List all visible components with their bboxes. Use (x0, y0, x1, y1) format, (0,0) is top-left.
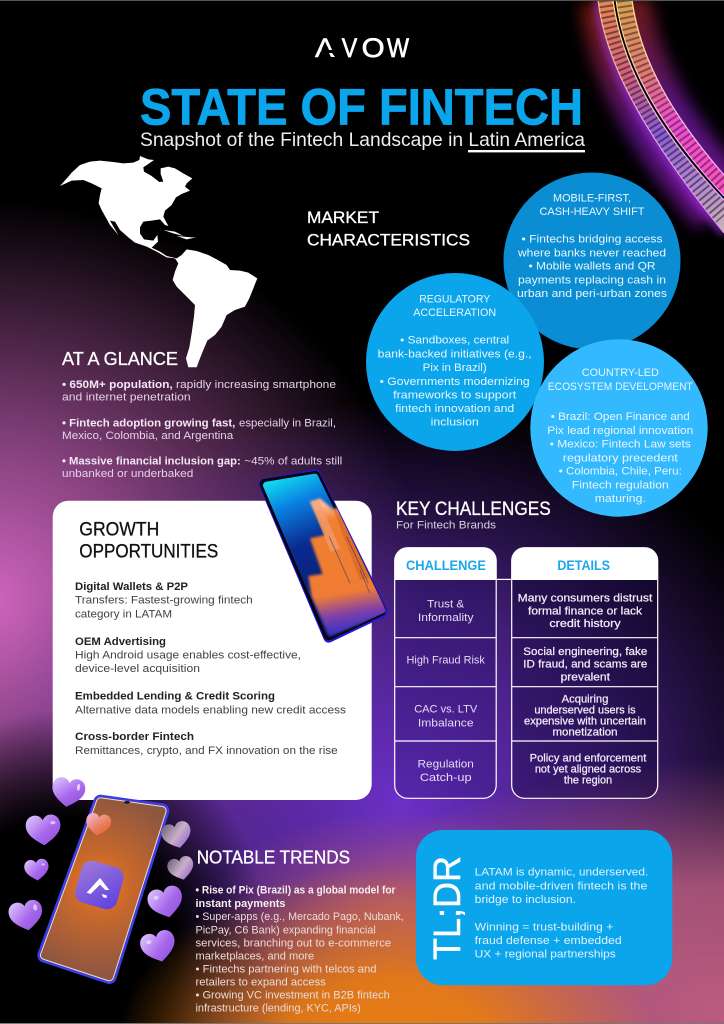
item: OEM advertising (75, 636, 301, 675)
column: details: Social engineering, fake (523, 646, 647, 658)
item: cross-border fintech (75, 731, 338, 757)
text block: notable trends bullets: retailers to expand access (196, 976, 326, 988)
text block: notable trends bullets: PicPay, C6 Bank) expanding financial (196, 924, 376, 936)
heading: key challenges (396, 499, 551, 532)
column: details: expensive with uncertain (524, 715, 646, 727)
panel: mobile-first circle: where banks never reached (517, 247, 666, 259)
column: details: DETAILS (557, 558, 610, 573)
item: OEM advertising: High Android usage enables cost-effective, (75, 649, 301, 661)
text block: summary: Winning = trust-building + (475, 921, 614, 933)
icon: hearts (7, 776, 196, 966)
icon: app logo (73, 858, 126, 912)
title: STATE OF FINTECH (140, 78, 583, 136)
item: cross-border fintech: Remittances, crypto, and FX innovation on the rise (75, 745, 338, 757)
panel: regulatory acceleration circle: • Sandboxes, central (400, 335, 509, 347)
text block: notable trends bullets: • Fintechs partnering with telcos and (196, 963, 376, 975)
column: details: monetization (552, 726, 618, 738)
column: challenge: High Fraud Risk (407, 655, 485, 667)
item: embedded lending: Alternative data models enabling new credit access (75, 704, 346, 716)
text block: at a glance bullets: and internet penetration (62, 392, 191, 404)
heading: TL;DR: TL;DR (427, 856, 469, 960)
map of the Americas (60, 156, 257, 367)
panel: mobile-first circle: urban and peri-urban zones (517, 288, 667, 300)
panel: regulatory acceleration circle: • Governments modernizing (380, 376, 530, 388)
column: details: not yet aligned across (535, 764, 641, 776)
panel: regulatory acceleration circle: fintech innovation and (395, 403, 514, 415)
panel: regulatory acceleration circle: REGULATORY (419, 294, 491, 306)
panel: mobile-first circle: MOBILE-FIRST, (553, 193, 631, 205)
text block: at a glance bullets: • Fintech adoption growing fast, (62, 417, 235, 429)
column: details: prevalent (561, 671, 611, 683)
text block: at a glance bullets: ~45% of adults still (244, 455, 342, 467)
heading: key challenges: KEY CHALLENGES (396, 499, 551, 520)
panel: country-led circle: maturing. (595, 493, 646, 505)
logo: AVOW (315, 33, 409, 63)
column: details (512, 548, 658, 798)
text block: notable trends bullets: • Super-apps (e.g., Mercado Pago, Nubank, (196, 911, 404, 923)
panel: country-led circle (530, 339, 708, 517)
panel: country-led circle: • Colombia, Chile, Peru: (559, 466, 682, 478)
icon: phone with skyline screen (264, 475, 387, 637)
item: digital wallets: Digital Wallets & P2P (75, 581, 188, 593)
panel: country-led circle: regulatory precedent (563, 452, 679, 464)
column: challenge: Informality (418, 612, 474, 624)
column: details: Acquiring (562, 693, 608, 705)
panel: TL;DR (416, 830, 672, 985)
text block: at a glance bullets (62, 379, 342, 480)
text block: summary: and mobile-driven fintech is the (475, 880, 647, 892)
decorative neon arc (598, 0, 724, 233)
logo: AVOW: O (362, 33, 385, 63)
text block: notable trends bullets (196, 884, 404, 1014)
column: challenge: Imbalance (418, 717, 474, 729)
text block: at a glance bullets: • 650M+ population, (62, 379, 173, 391)
logo: AVOW: A (315, 33, 335, 63)
connector between columns (496, 579, 512, 580)
item: digital wallets: category in LATAM (75, 608, 172, 620)
panel: regulatory acceleration circle: ACCELERATION (413, 307, 496, 319)
text block: notable trends bullets: services, branching out to e-commerce (196, 938, 391, 950)
column: challenge: Trust & (427, 598, 465, 610)
text block: at a glance bullets: rapidly increasing smartphone (176, 379, 336, 391)
panel: country-led circle: • Brazil: Open Finance and (551, 411, 690, 423)
item: OEM advertising: device-level acquisition (75, 663, 200, 675)
text block: notable trends bullets: marketplaces, and more (196, 950, 314, 962)
heading: market characteristics: MARKET (307, 208, 379, 227)
column: details: Policy and enforcement (530, 753, 647, 765)
panel: regulatory acceleration circle: inclusion (431, 417, 479, 429)
column: details: underserved users is (534, 704, 636, 716)
panel: country-led circle: Pix lead regional innovation (547, 425, 693, 437)
panel: regulatory acceleration circle: frameworks to support (393, 389, 517, 401)
column: details: the region (564, 775, 612, 787)
panel: country-led circle: COUNTRY-LED (582, 367, 659, 379)
text block: notable trends bullets: instant payments (196, 898, 286, 910)
phone body (45, 801, 162, 977)
item: embedded lending (75, 690, 346, 716)
logo: AVOW: W (387, 33, 409, 63)
item: digital wallets (75, 581, 253, 620)
text block: summary: bridge to inclusion. (475, 894, 576, 906)
panel: regulatory acceleration circle (366, 273, 544, 451)
panel: country-led circle: ECOSYSTEM DEVELOPMENT (548, 381, 693, 393)
item: digital wallets: Transfers: Fastest-growing fintech (75, 594, 253, 606)
column: challenge: Regulation (418, 758, 474, 770)
text block: at a glance bullets: • Massive financial inclusion gap: (62, 455, 241, 467)
text block: notable trends bullets: • Growing VC investment in B2B fintech (196, 989, 390, 1001)
panel: regulatory acceleration circle: Pix in Brazil) (423, 362, 487, 374)
heading: growth opportunities: OPPORTUNITIES (79, 540, 218, 562)
column: challenge: Catch-up (420, 772, 472, 784)
logo: AVOW: V (342, 33, 357, 63)
text block: at a glance bullets: Mexico, Colombia, and Argentina (62, 430, 234, 442)
heading: growth opportunities (79, 518, 218, 562)
panel: regulatory acceleration circle: bank-backed initiatives (e.g., (378, 348, 532, 360)
text block: summary: UX + regional partnerships (475, 949, 616, 961)
panel: growth opportunities (53, 501, 372, 800)
icon: phone with app logo and hearts (7, 776, 196, 977)
text block: summary: fraud defense + embedded (475, 935, 622, 947)
item: cross-border fintech: Cross-border Fintech (75, 731, 194, 743)
text block: at a glance bullets: unbanked or underbaked (62, 468, 193, 480)
heading: growth opportunities: GROWTH (79, 518, 159, 540)
column: challenge: CHALLENGE (406, 558, 486, 573)
text block: notable trends bullets: infrastructure (lending, KYC, APIs) (196, 1002, 361, 1014)
table: challenges and details (395, 548, 658, 798)
heading: market characteristics: CHARACTERISTICS (307, 230, 470, 250)
heading: at a glance: AT A GLANCE (62, 349, 178, 369)
heading: market characteristics (307, 208, 470, 250)
column: challenge: CAC vs. LTV (414, 704, 478, 716)
text block: at a glance bullets: especially in Brazil, (239, 417, 336, 429)
heading: key challenges: For Fintech Brands (396, 520, 496, 532)
panel: mobile-first circle (504, 172, 680, 350)
column: details: credit history (549, 618, 621, 630)
column: details: formal finance or lack (528, 605, 642, 617)
panel: country-led circle: Fintech regulation (572, 479, 669, 491)
panel: mobile-first circle: • Fintechs bridging access (522, 234, 663, 246)
item: OEM advertising: OEM Advertising (75, 636, 166, 648)
column: details: ID fraud, and scams are (523, 659, 647, 671)
text block: summary: LATAM is dynamic, underserved. (475, 867, 648, 879)
column: details: Many consumers distrust (518, 593, 653, 605)
panel: mobile-first circle: CASH-HEAVY SHIFT (540, 206, 645, 218)
text block: notable trends bullets: • Rise of Pix (Brazil) as a global model for (196, 884, 396, 896)
subtitle: Snapshot of the Fintech Landscape in Latin America (140, 129, 585, 151)
panel: mobile-first circle: payments replacing cash in (518, 275, 666, 287)
heading: notable trends: NOTABLE TRENDS (197, 846, 350, 867)
panel: mobile-first circle: • Mobile wallets and QR (528, 261, 656, 273)
text block: summary (475, 867, 648, 961)
item: embedded lending: Embedded Lending & Credit Scoring (75, 690, 275, 702)
panel: country-led circle: • Mexico: Fintech Law sets (550, 438, 691, 450)
column: challenge (395, 548, 496, 798)
